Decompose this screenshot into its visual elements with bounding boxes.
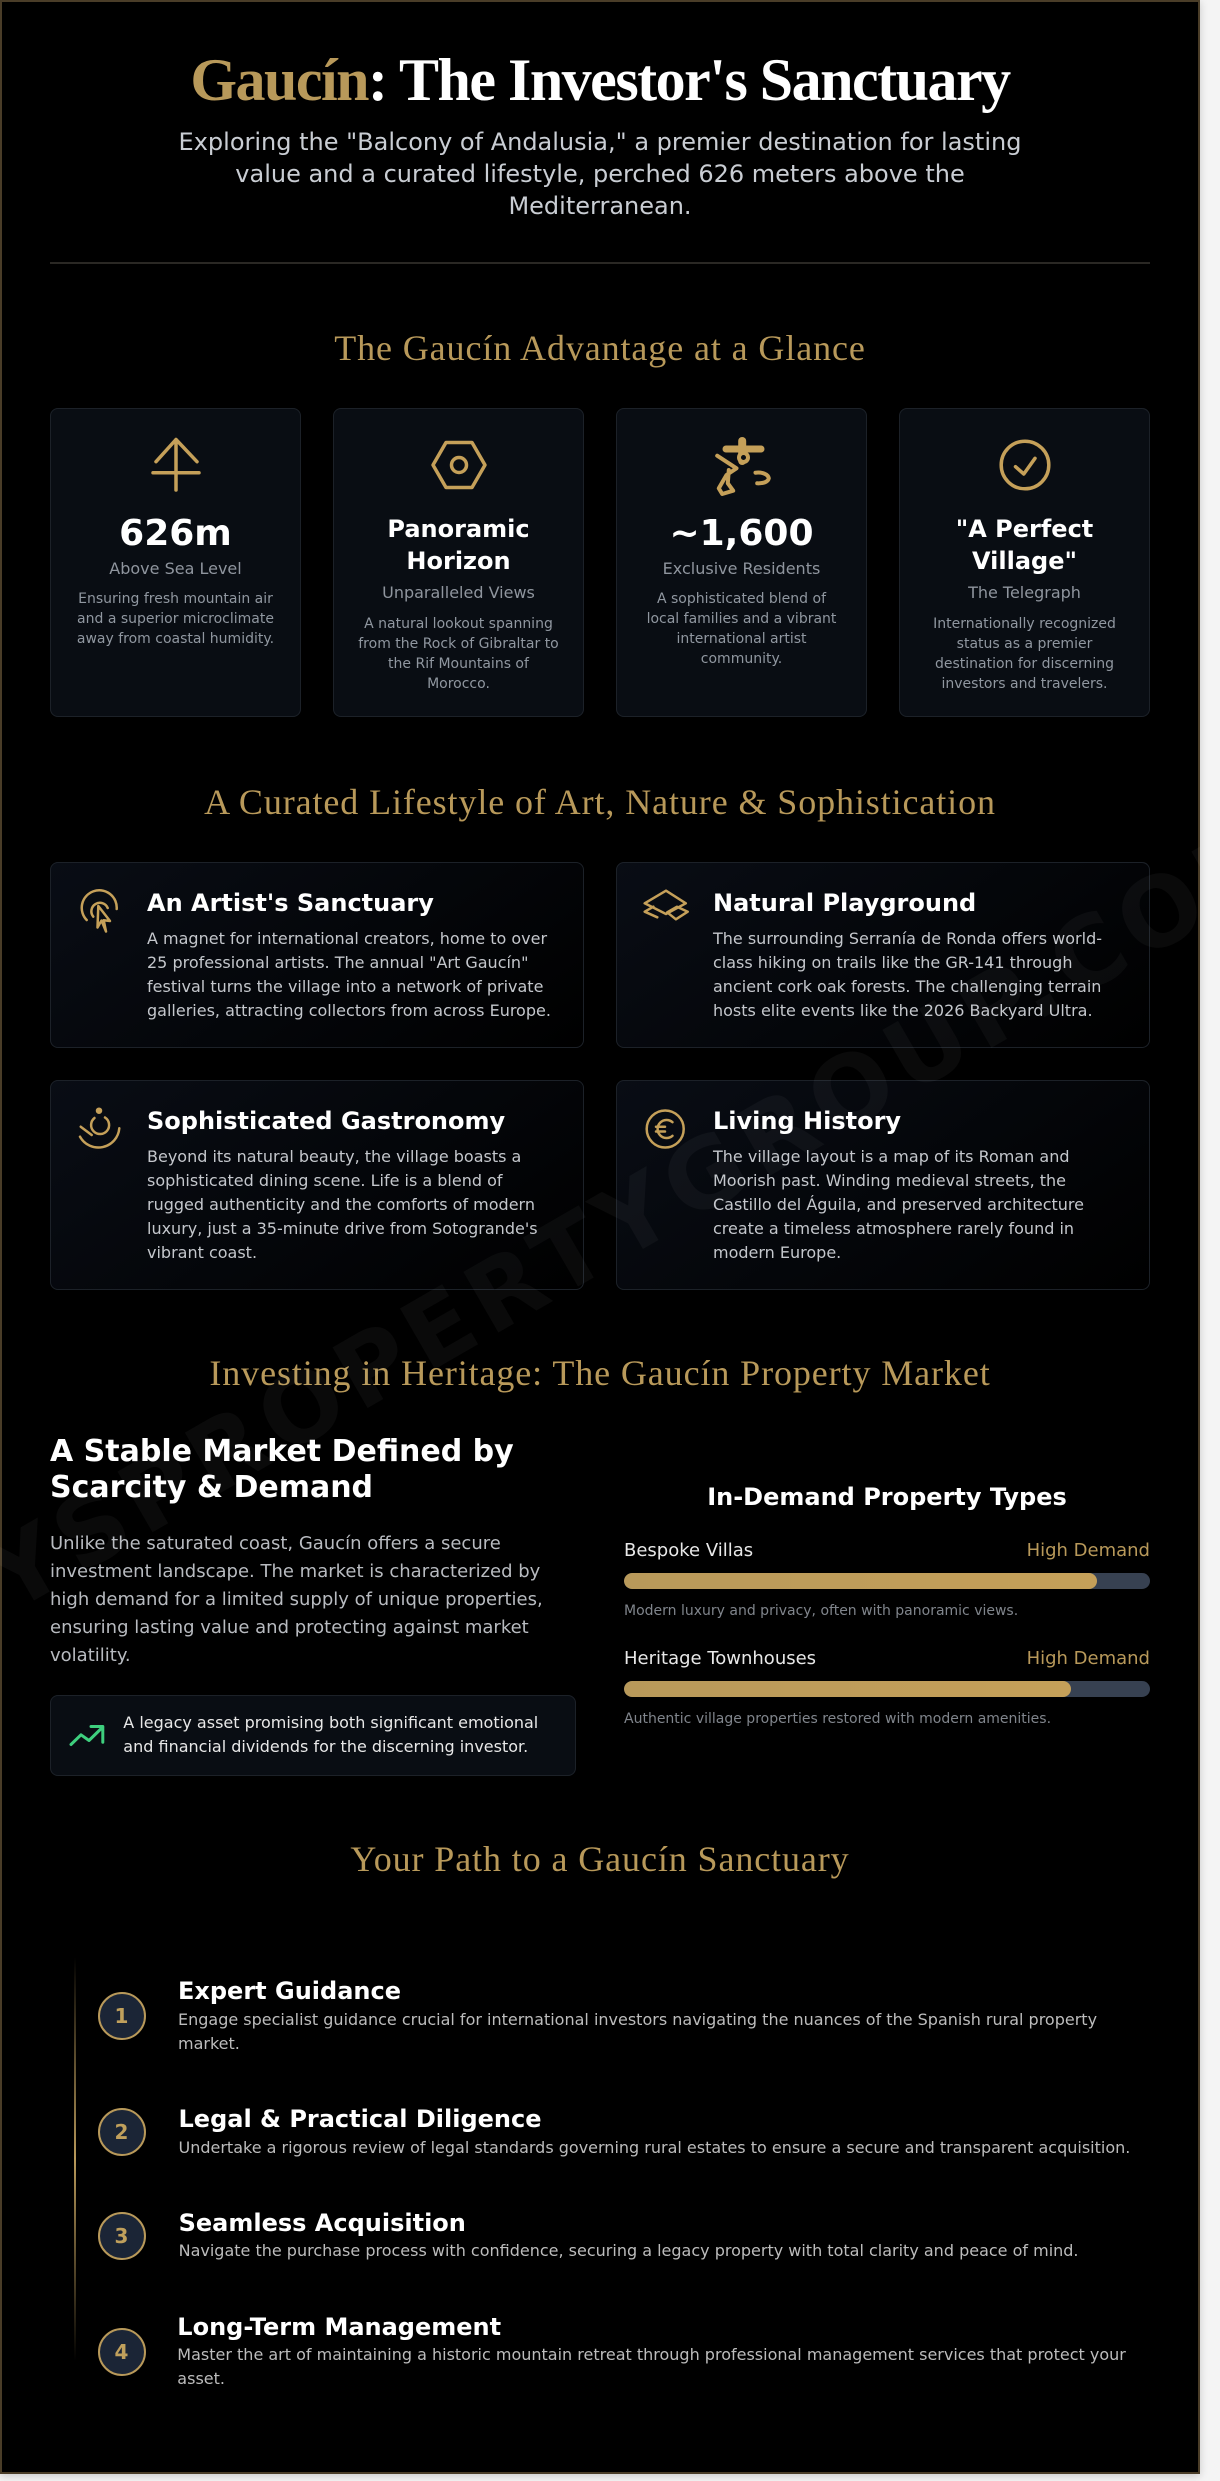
body: Moorish past. Winding medieval streets, the <box>713 1170 1066 1190</box>
market heading: Scarcity & Demand <box>50 1470 373 1505</box>
label: Exclusive Residents <box>663 558 820 578</box>
step title: Legal & Practical Diligence <box>178 2105 542 2133</box>
step number: 4 <box>115 2340 128 2364</box>
icon: arrow up with crossbar <box>151 438 201 492</box>
description: the Rif Mountains of <box>388 656 529 672</box>
step text: Navigate the purchase process with confidence, securing a legacy property with total clarity and peace of mind. <box>179 2241 1079 2260</box>
step title: Expert Guidance <box>178 1977 401 2005</box>
bespoke villas note: Modern luxury and privacy, often with panoramic views. <box>624 1603 1018 1619</box>
step text: Engage specialist guidance crucial for international investors navigating the nuances of the Spanish rural property <box>178 2010 1097 2029</box>
description: community. <box>701 651 782 667</box>
body <box>147 1146 538 1262</box>
value: Panoramic <box>387 515 530 543</box>
step text: Undertake a rigorous review of legal standards governing rural estates to ensure a secure and transparent acquisition. <box>178 2138 1130 2157</box>
body: class hiking on trails like the GR-141 through <box>713 952 1072 972</box>
icon: euro coin <box>645 1109 685 1149</box>
body: The surrounding Serranía de Ronda offers world- <box>713 928 1102 948</box>
body: A magnet for international creators, home to over <box>147 928 547 948</box>
description: destination for discerning <box>935 656 1114 672</box>
body: galleries, attracting collectors from across Europe. <box>147 1000 551 1020</box>
panel: telegraph stat <box>899 408 1150 717</box>
value: Horizon <box>406 547 511 575</box>
body: festival turns the village into a network of private <box>147 976 543 996</box>
description: status as a premier <box>957 636 1092 652</box>
subtitle <box>179 128 1021 220</box>
heritage townhouses demand: High Demand <box>1027 1648 1150 1669</box>
step number <box>98 2328 146 2376</box>
body: luxury, just a 35-minute drive from Sotogrande's <box>147 1218 538 1238</box>
value <box>387 515 530 575</box>
body: ancient cork oak forests. The challenging terrain <box>713 976 1101 996</box>
value: ~1,600 <box>669 512 814 554</box>
description: A sophisticated blend of <box>657 591 826 607</box>
title: Living History <box>713 1107 901 1135</box>
label: The Telegraph <box>968 582 1081 602</box>
panel: residents stat <box>616 408 867 717</box>
callout text <box>123 1713 538 1756</box>
chart title: In-Demand Property Types <box>707 1482 1067 1510</box>
step number <box>98 2108 146 2156</box>
callout: legacy asset <box>50 1694 576 1776</box>
value: 626m <box>119 512 232 554</box>
description: local families and a vibrant <box>647 611 836 627</box>
panel: artist's sanctuary <box>50 862 584 1048</box>
description: Morocco. <box>427 676 490 692</box>
body: vibrant coast. <box>147 1242 257 1262</box>
icon: dot ring and arc <box>78 1108 121 1149</box>
label: Unparalleled Views <box>382 582 535 602</box>
subtitle: Mediterranean. <box>508 192 692 220</box>
step 4 <box>98 2313 1126 2388</box>
bar: bespoke villas 90% <box>624 1573 1150 1589</box>
step text <box>177 2345 1126 2388</box>
description: international artist <box>676 631 807 647</box>
body: Beyond its natural beauty, the village boasts a <box>147 1146 521 1166</box>
subtitle: value and a curated lifestyle, perched 626 meters above the <box>235 160 965 188</box>
heritage townhouses note: Authentic village properties restored with modern amenities. <box>624 1711 1051 1727</box>
market paragraph: Unlike the saturated coast, Gaucín offers a secure <box>50 1533 501 1554</box>
panel: living history <box>616 1080 1150 1290</box>
body <box>147 928 551 1020</box>
icon: cursor with arcs <box>80 889 118 933</box>
timeline line <box>74 1957 76 2361</box>
step number <box>98 2212 146 2260</box>
title: Sophisticated Gastronomy <box>147 1107 505 1135</box>
market paragraph: ensuring lasting value and protecting against market <box>50 1617 529 1638</box>
description: away from coastal humidity. <box>77 631 274 647</box>
body: rugged authenticity and the comforts of modern <box>147 1194 535 1214</box>
description <box>647 591 836 667</box>
step text <box>178 2010 1097 2053</box>
step 1 <box>98 1977 1097 2053</box>
bespoke villas demand: High Demand <box>1027 1540 1150 1561</box>
body: Castillo del Águila, and preserved architecture <box>713 1194 1084 1214</box>
step 3 <box>98 2209 1079 2260</box>
step text: asset. <box>177 2369 225 2388</box>
value: "A Perfect <box>956 515 1093 543</box>
heading: advantage: The Gaucín Advantage at a Glance <box>334 328 866 368</box>
body: hosts elite events like the 2026 Backyard Ultra. <box>713 1000 1093 1020</box>
description <box>358 616 559 692</box>
icon: residents glyph <box>715 437 771 496</box>
bespoke villas label: Bespoke Villas <box>624 1540 753 1561</box>
value <box>956 515 1093 575</box>
icon: layered diamonds <box>643 889 689 921</box>
title: An Artist's Sanctuary <box>147 889 434 917</box>
title: Gaucín: The Investor's Sanctuary <box>190 47 1010 113</box>
market heading <box>50 1434 514 1505</box>
body <box>712 1146 1084 1262</box>
body: sophisticated dining scene. Life is a blend of <box>147 1170 503 1190</box>
body: The village layout is a map of its Roman and <box>713 1146 1070 1166</box>
heading: path: Your Path to a Gaucín Sanctuary <box>350 1839 850 1879</box>
title: Natural Playground <box>713 889 976 917</box>
description <box>77 591 274 647</box>
panel: gastronomy <box>50 1080 584 1290</box>
market paragraph: investment landscape. The market is characterized by <box>50 1561 540 1582</box>
heading: property market: Investing in Heritage: The Gaucín Property Market <box>209 1353 991 1393</box>
panel: altitude stat <box>50 408 301 717</box>
body <box>712 928 1102 1020</box>
callout text: and financial dividends for the discerning investor. <box>123 1737 528 1756</box>
description: Ensuring fresh mountain air <box>78 591 273 607</box>
step text: market. <box>178 2034 240 2053</box>
description <box>933 616 1116 692</box>
description: from the Rock of Gibraltar to <box>358 636 559 652</box>
step number: 2 <box>115 2120 128 2144</box>
step number <box>98 1992 146 2040</box>
heading: lifestyle: A Curated Lifestyle of Art, Nature & Sophistication <box>204 782 996 822</box>
subtitle: Exploring the "Balcony of Andalusia," a premier destination for lasting <box>179 128 1021 156</box>
step number: 1 <box>115 2004 128 2028</box>
body: 25 professional artists. The annual "Art Gaucín" <box>147 952 528 972</box>
body: create a timeless atmosphere rarely found in <box>713 1218 1074 1238</box>
panel: panoramic stat <box>333 408 584 717</box>
step title: Seamless Acquisition <box>179 2209 466 2237</box>
heritage townhouses label: Heritage Townhouses <box>624 1648 816 1669</box>
icon: trending up arrow <box>69 1725 104 1746</box>
bar: heritage townhouses 85% <box>624 1681 1150 1697</box>
description: A natural lookout spanning <box>364 616 553 632</box>
icon: check circle <box>999 440 1051 490</box>
market paragraph: volatility. <box>50 1645 131 1666</box>
chart: in-demand property types <box>624 1482 1150 1727</box>
description: Internationally recognized <box>933 616 1116 632</box>
step number: 3 <box>115 2224 128 2248</box>
market paragraph: high demand for a limited supply of unique properties, <box>50 1589 543 1610</box>
market paragraph <box>50 1533 543 1666</box>
market heading: A Stable Market Defined by <box>50 1434 514 1469</box>
description: investors and travelers. <box>941 676 1108 692</box>
description: and a superior microclimate <box>77 611 274 627</box>
callout text: A legacy asset promising both significant emotional <box>123 1713 538 1732</box>
step title: Long-Term Management <box>177 2313 501 2341</box>
step 2 <box>98 2105 1130 2157</box>
body: modern Europe. <box>713 1242 841 1262</box>
panel: natural playground <box>616 862 1150 1048</box>
label: Above Sea Level <box>109 558 242 578</box>
value: Village" <box>972 547 1077 575</box>
step text: Master the art of maintaining a historic mountain retreat through professional management services that protect your <box>177 2345 1126 2364</box>
icon: hexagon <box>431 440 487 490</box>
